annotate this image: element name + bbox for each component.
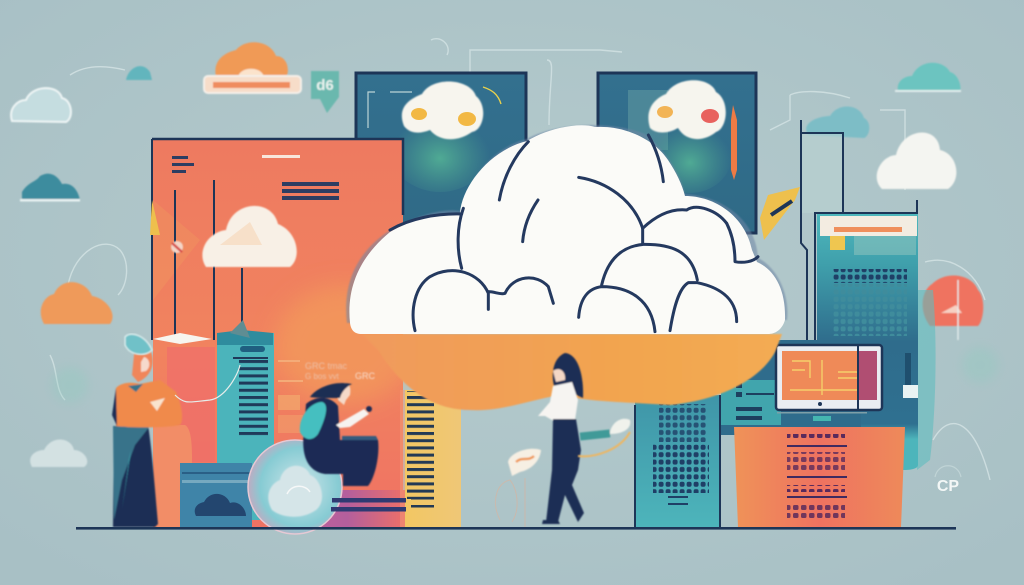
server: teal left — [217, 320, 274, 520]
icon: speech tag: d6 — [316, 77, 334, 94]
header lines: panel — [172, 155, 339, 200]
cloud: left screen — [402, 81, 483, 139]
panel: right teal server — [817, 214, 918, 470]
icon: red marker — [171, 241, 183, 253]
background connector lines — [50, 39, 990, 480]
cloud: teal top — [126, 66, 152, 80]
cloud: coral right — [923, 275, 983, 340]
cloud: white right — [877, 132, 956, 189]
cloud: teal top right — [895, 63, 961, 92]
cloud: top left outline — [11, 88, 71, 122]
icon: yellow left marks — [411, 108, 476, 126]
text: desk box table — [787, 434, 847, 518]
glow: right screen — [648, 117, 732, 193]
panel: teal server centre — [635, 395, 720, 528]
lines: teal server — [239, 358, 268, 438]
big cloud: coloured rim — [346, 125, 787, 323]
panel: right translucent strip — [917, 290, 936, 470]
icon: yellow arm — [760, 187, 800, 240]
tinted text: GRC block — [305, 361, 376, 381]
bar: orange header — [834, 227, 902, 232]
tablet: teal device — [578, 419, 630, 456]
panel: back left screen — [356, 73, 526, 233]
tinted text: GRC block: G bos vvt — [305, 372, 340, 381]
icon: speech swirl — [125, 334, 152, 354]
thin wire loops — [495, 478, 525, 528]
icon: dark cloud — [195, 494, 246, 516]
glow: orange haze lower right — [275, 285, 415, 405]
icon: CP badge — [935, 466, 961, 495]
globe with cloud — [248, 440, 342, 534]
person: standing left with orange jacket — [112, 344, 182, 527]
big cloud: orange underside — [362, 334, 782, 410]
cloud: teal left — [20, 174, 80, 202]
cloud: orange top with tray — [204, 42, 301, 93]
icon: right screen marks — [657, 106, 673, 118]
tinted text: GRC block: GRC — [355, 371, 376, 381]
cloud: white in panel — [202, 206, 297, 267]
panel: orange desk box — [734, 427, 905, 527]
bar: orange vertical — [731, 105, 737, 180]
column: red behind person — [167, 347, 215, 462]
cloud: pale bottom left — [30, 439, 87, 467]
tinted text: GRC block: GRC tmac — [305, 361, 348, 371]
icon: speech tag — [311, 71, 339, 113]
icon: white hat shape — [153, 333, 212, 344]
baseline — [76, 527, 956, 530]
monitor — [776, 345, 882, 421]
panel: back right screen — [598, 73, 756, 233]
grid: server dots — [833, 284, 907, 336]
panel: blue cloud card — [180, 463, 252, 528]
panel: right server frame lines — [800, 120, 917, 345]
panel: dark blue behind monitor — [721, 340, 861, 435]
glow: left screen — [390, 108, 490, 192]
cloud: right screen — [648, 80, 726, 139]
text lines: monitor stand panel — [736, 383, 774, 420]
icon: chat bubble — [508, 449, 541, 476]
panel: purple base gradient — [290, 490, 405, 528]
big cloud: white body — [349, 125, 785, 334]
marker: white block — [903, 385, 918, 398]
cloud: teal middle right — [806, 106, 869, 138]
column: light orange beside person — [153, 425, 192, 528]
person: seated woman — [300, 383, 378, 486]
panel: large orange panel — [150, 139, 415, 528]
big cloud: inner contour lines — [390, 135, 758, 332]
person: standing woman centre — [538, 353, 584, 524]
grid: centre dots — [653, 443, 709, 493]
icon: vertical pipes — [175, 180, 242, 340]
lines: yellow server — [407, 391, 434, 499]
icon: CP badge: CP — [937, 478, 959, 495]
icon: yellow square — [830, 236, 845, 250]
chart: monitor diagram — [790, 360, 858, 395]
panel: pale frame fill — [802, 133, 843, 213]
base bars: purple panel — [331, 498, 406, 512]
server: yellow — [400, 390, 461, 528]
arrow: wire from person to server — [175, 365, 240, 402]
cloud: orange left — [41, 282, 113, 324]
faint blobs — [52, 347, 998, 403]
